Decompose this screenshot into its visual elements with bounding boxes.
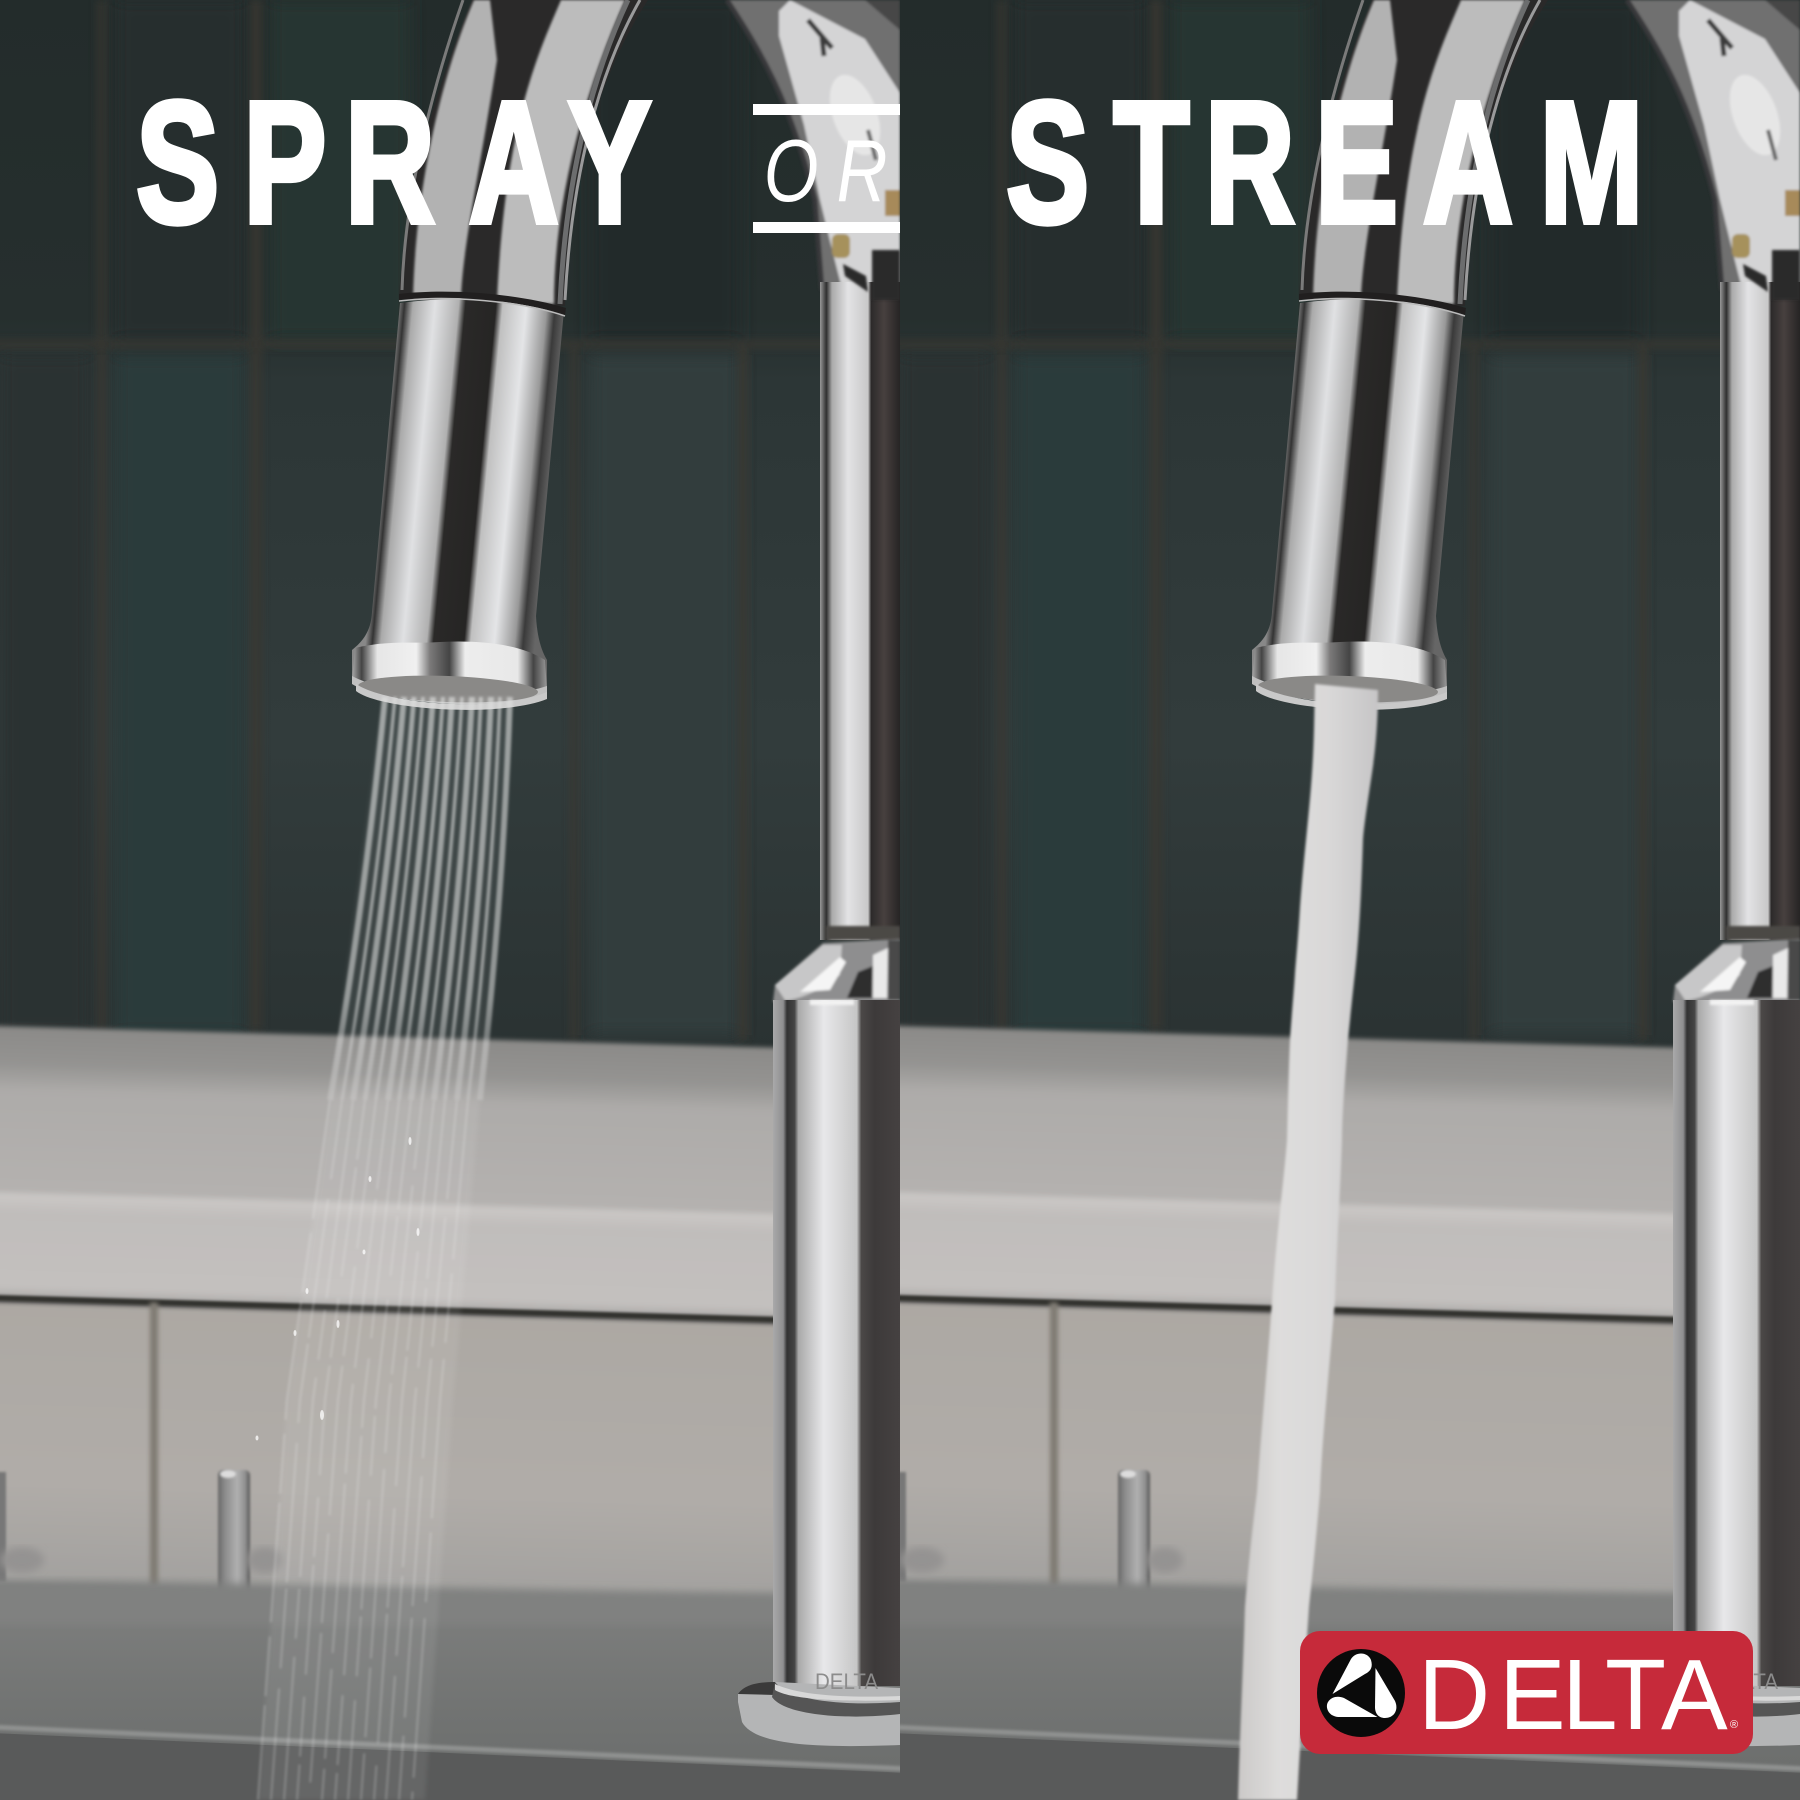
registered mark: ®	[1730, 1719, 1738, 1731]
panel: stream photo	[870, 0, 1800, 1800]
icon: Delta triangle mark	[1317, 1649, 1405, 1737]
logo: Delta badge	[1300, 1631, 1753, 1754]
panel: spray photo	[0, 0, 930, 1800]
faucet base engraving: DELTA	[815, 1669, 878, 1694]
wordmark: DELTA	[1418, 1639, 1728, 1751]
kitchen scene with chrome faucet	[0, 0, 930, 1800]
connector: OR between rules	[753, 104, 900, 233]
faucet base engraving, mostly behind logo: DELTA	[1715, 1669, 1778, 1694]
spray water strands	[256, 697, 510, 1800]
heading: STREAM: STREAM	[1006, 66, 1643, 259]
rule top	[753, 104, 900, 115]
solid water stream	[1238, 684, 1378, 1800]
kitchen scene with chrome faucet, repeated	[870, 0, 1800, 1800]
heading: SPRAY: SPRAY	[136, 66, 651, 259]
OR label: OR	[764, 121, 887, 220]
rule bottom	[753, 222, 900, 233]
